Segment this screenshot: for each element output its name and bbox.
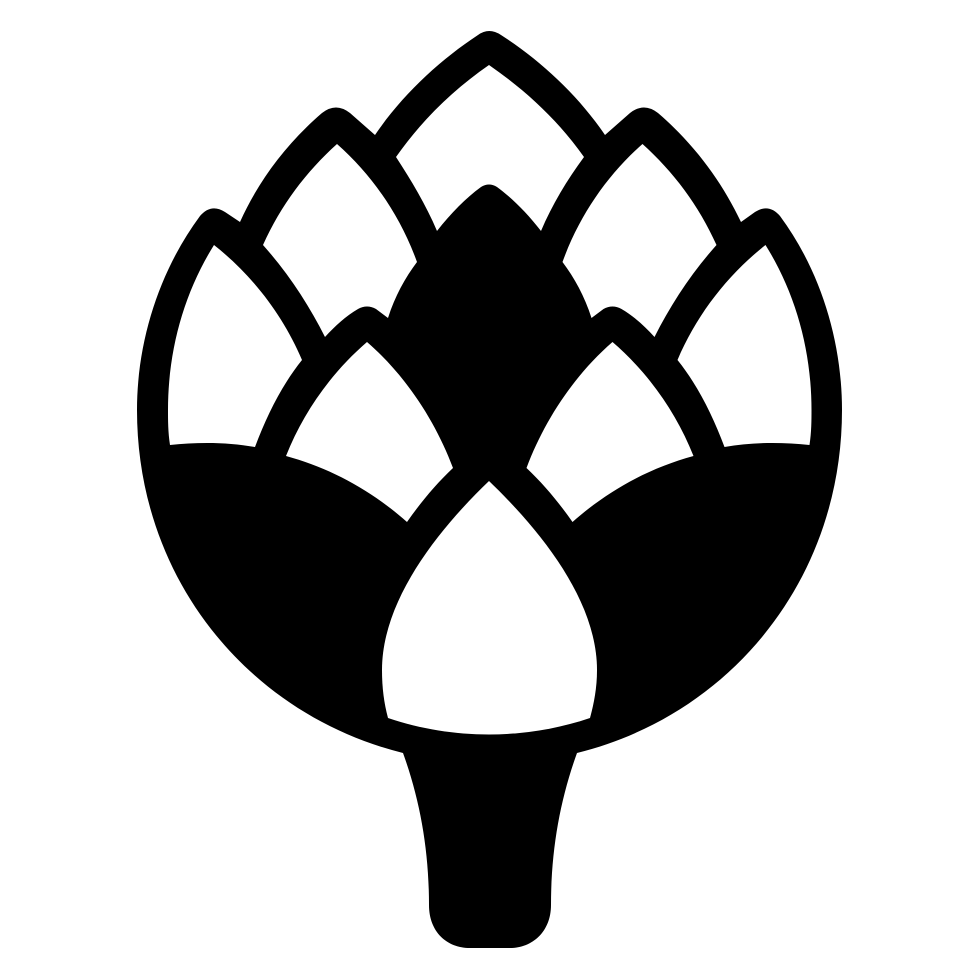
leaf: lower left — [286, 342, 453, 522]
leaves: left side — [168, 144, 453, 522]
silhouette: artichoke body and stem — [137, 31, 842, 948]
leaves: right side — [526, 144, 812, 522]
leaf: bottom center — [382, 481, 597, 734]
leaf: far left — [168, 245, 302, 447]
leaf: far right — [678, 245, 812, 447]
leaf: top center — [396, 65, 584, 231]
leaf: upper left — [263, 144, 417, 337]
leaf: lower right — [526, 342, 694, 522]
leaf: upper right — [562, 144, 716, 337]
